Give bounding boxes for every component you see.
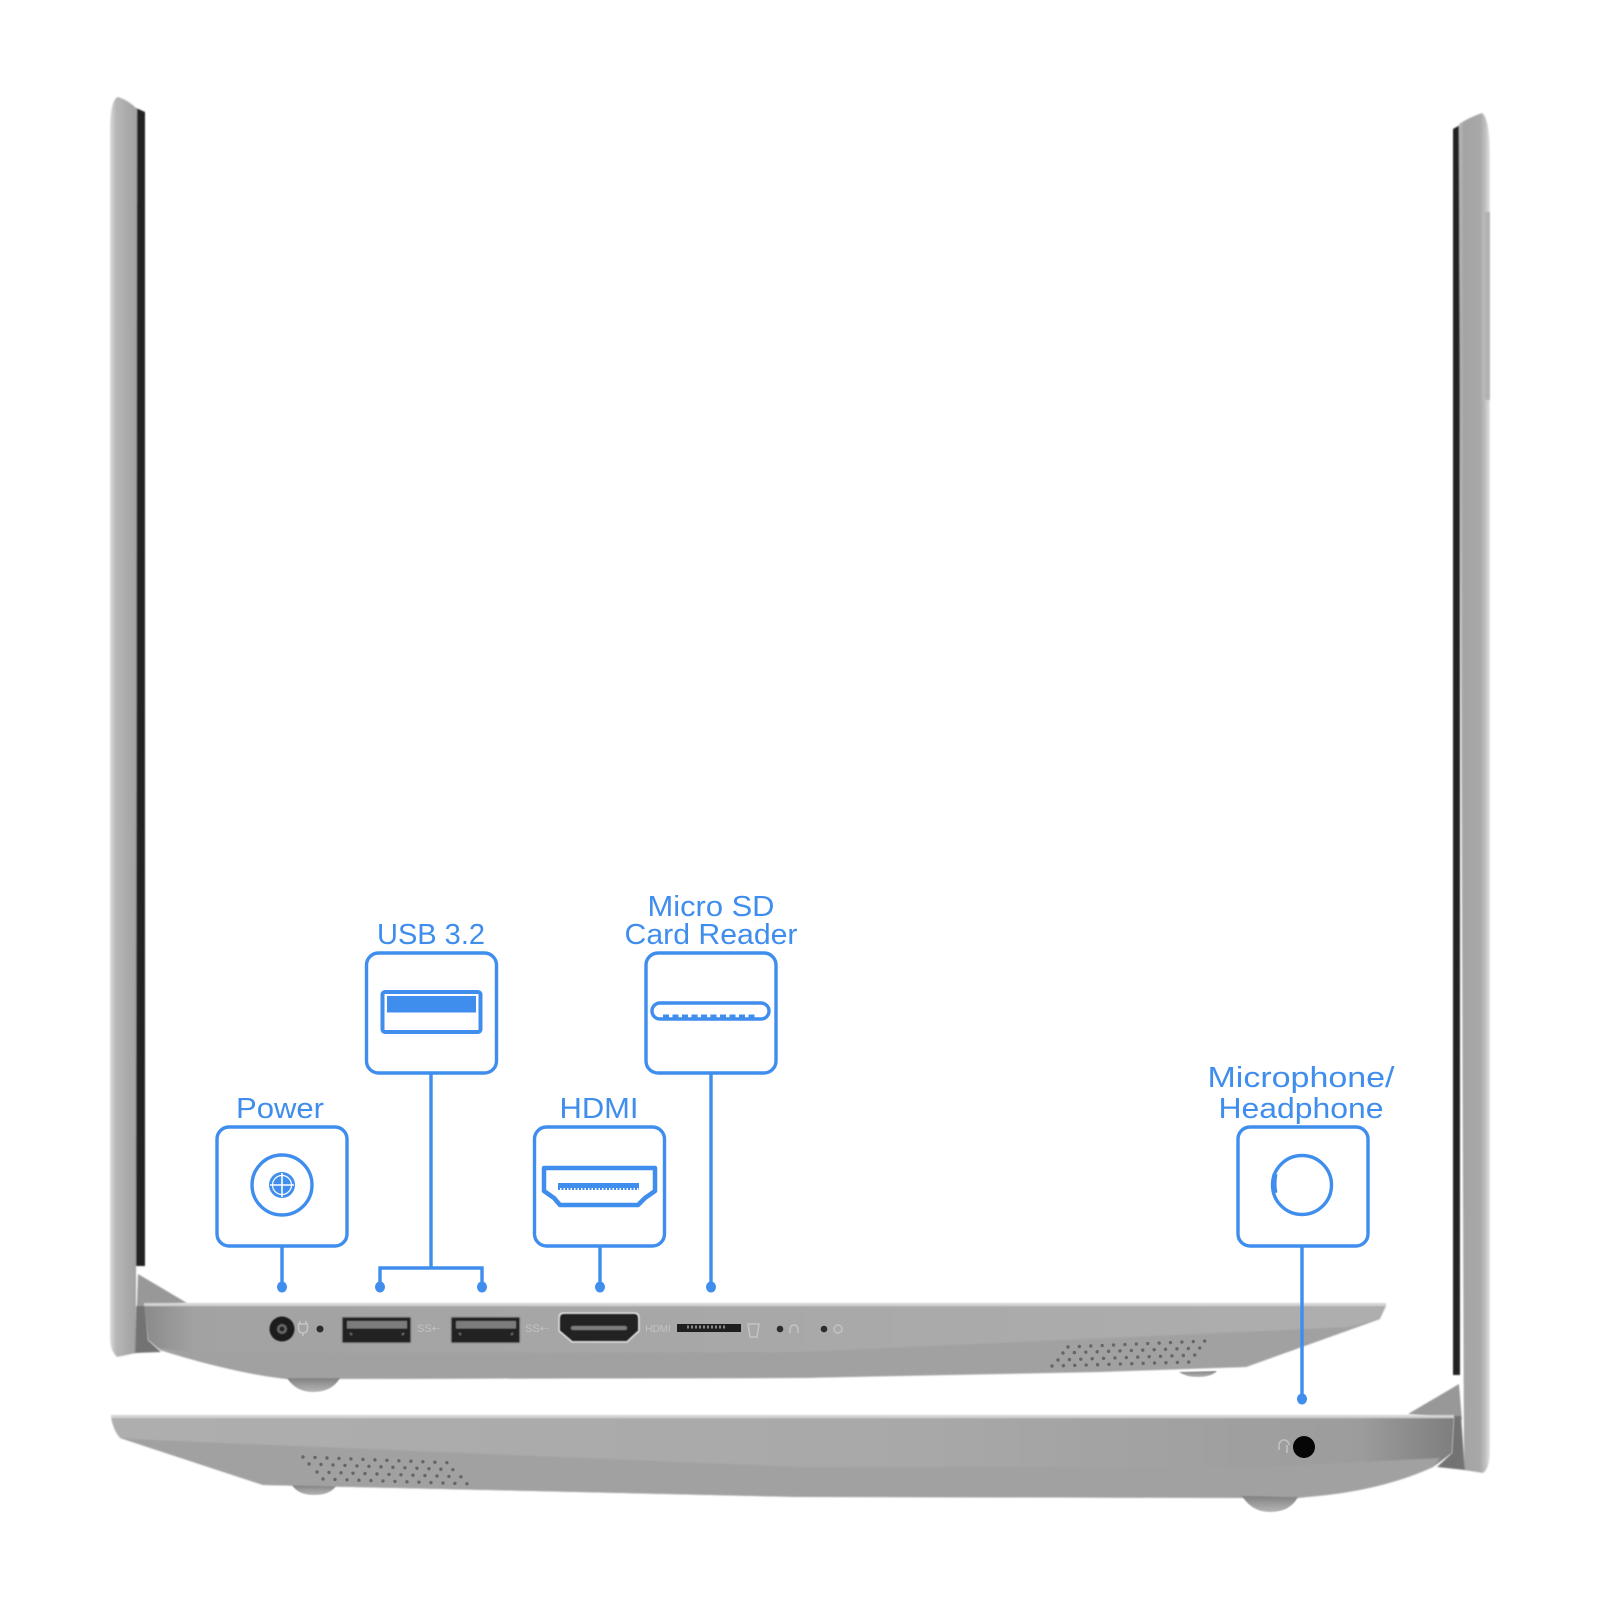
right laptop lid edge [1453,113,1490,1473]
icon: audio jack [1272,1156,1332,1214]
USB port 2 [451,1317,520,1343]
micro SD slot [677,1324,741,1332]
callout: Microphone/Headphone [1208,1062,1396,1404]
lower base foot left [292,1485,336,1495]
HDMI connector line [595,1246,605,1292]
HDMI port [559,1313,639,1342]
status dot [316,1326,324,1332]
upper speaker grille [1052,1341,1206,1366]
upper laptop base, left side view [135,1274,1386,1392]
power glyph [298,1321,308,1336]
power jack [270,1316,294,1342]
SS mark 2: SS⇠ [525,1323,549,1335]
label: Microphone/Headphone [1208,1062,1396,1125]
label: Micro SD Card Reader [624,891,798,951]
micro SD box [646,953,776,1073]
icon: USB port [382,992,480,1032]
headphone box [1238,1127,1368,1246]
USB box [366,953,496,1073]
right hinge [1408,1384,1465,1470]
left hinge [135,1274,187,1353]
upper base body [144,1303,1386,1379]
power box [217,1127,347,1246]
label: Microphone/Headphone: Headphone [1218,1093,1384,1125]
label: Micro SD Card Reader: Card Reader [624,919,798,951]
headphone glyph [790,1325,798,1333]
left laptop lid edge [110,97,145,1357]
callout: Micro SD Card Reader [624,891,798,1292]
lower base body [111,1415,1454,1498]
icon: HDMI port [544,1168,655,1205]
USB port 1 [342,1317,411,1343]
callout: Power [217,1093,347,1292]
HDMI box [534,1127,664,1246]
label: USB 3.2: USB 3.2 [377,919,485,951]
label: Micro SD Card Reader: Micro SD [648,891,774,923]
micro SD connector line [706,1073,716,1292]
USB connector bracket [375,1073,487,1292]
SS mark 1: SS⇠ [417,1323,441,1335]
lower base foot right [1242,1496,1298,1512]
callout: HDMI [534,1093,664,1292]
power button glyph [834,1325,842,1333]
label: Microphone/Headphone: Microphone/ [1208,1062,1396,1094]
icon: power jack [252,1155,312,1215]
SD glyph [748,1324,759,1337]
lower speaker grille [303,1457,473,1484]
callout: USB 3.2 [366,919,496,1292]
headphone connector line [1297,1246,1307,1404]
power connector line [277,1246,287,1292]
headphone jack [1293,1436,1315,1458]
headset glyph [1279,1440,1289,1453]
HDMI mark: HDMI [645,1324,671,1335]
upper base foot right [1179,1371,1217,1377]
activity dot 1 [777,1326,783,1332]
icon: SD slot [652,1003,769,1019]
label: Power: Power [236,1093,324,1125]
upper base foot left [287,1378,340,1392]
activity dot 2 [821,1326,827,1332]
lower laptop base, right side view [111,1384,1465,1512]
label: HDMI: HDMI [560,1093,638,1125]
